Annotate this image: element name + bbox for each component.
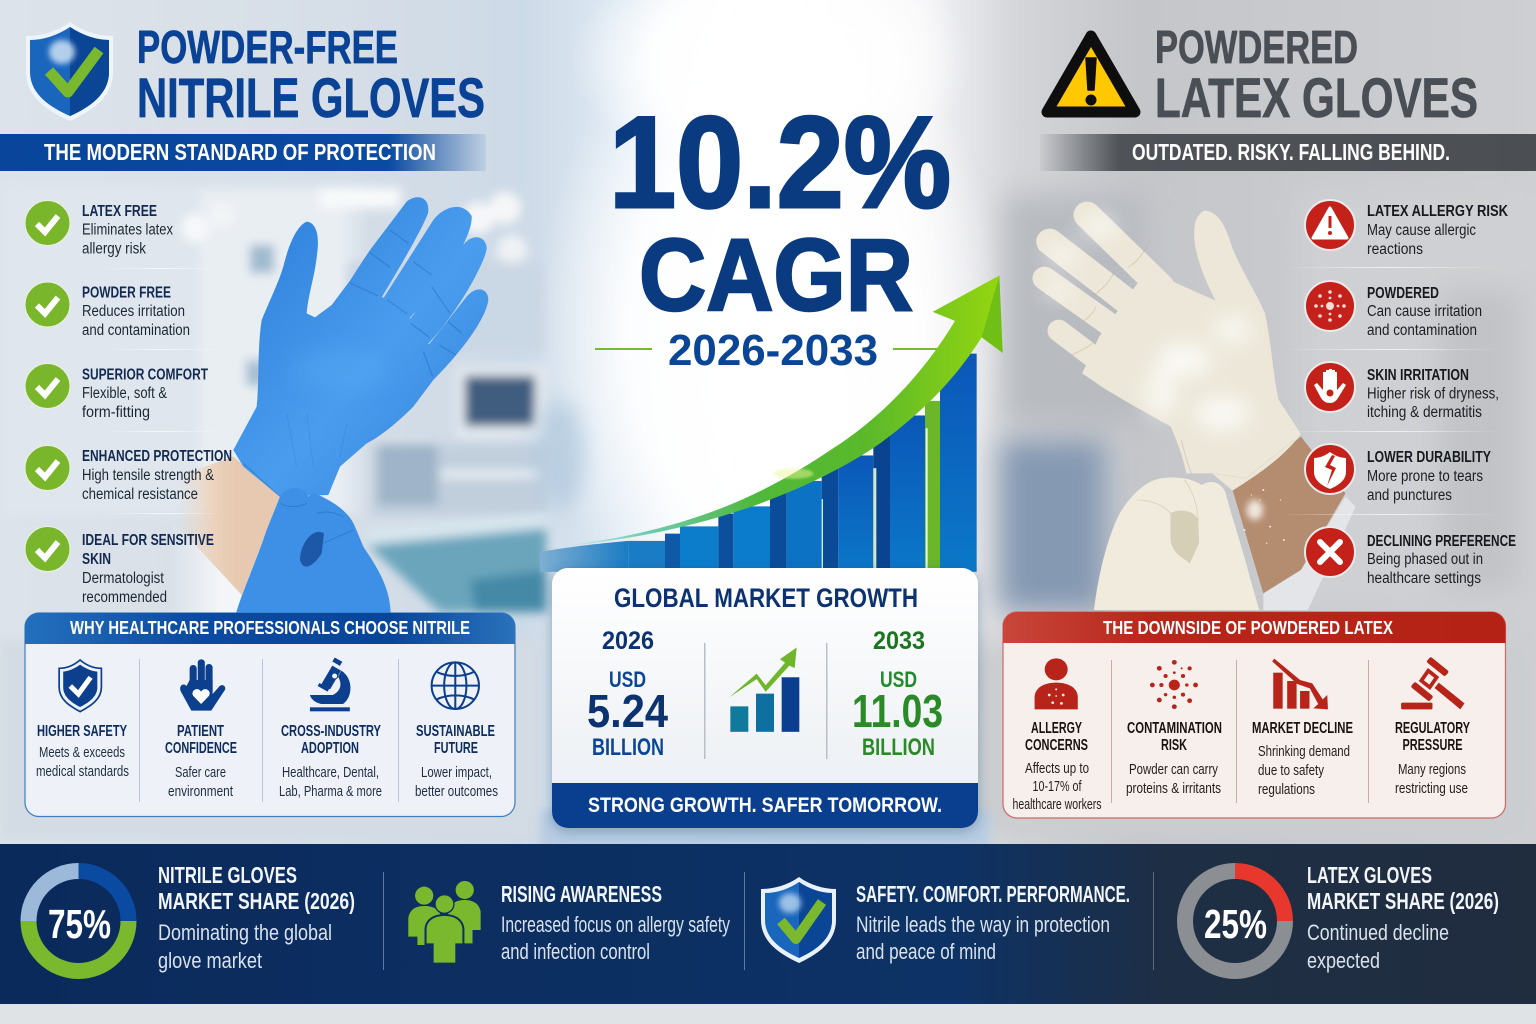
nitrile share donut: 75% — [48, 901, 111, 947]
risk: declining preference: healthcare settings — [1367, 570, 1481, 587]
market growth card — [552, 568, 978, 828]
rising awareness text: RISING AWARENESS — [501, 881, 662, 907]
column: higher safety: HIGHER SAFETY — [37, 723, 127, 740]
benefit: powder free — [25, 282, 190, 339]
latex gloves photo — [1044, 211, 1356, 610]
blurred operating room, right — [960, 190, 1536, 840]
2033 value: USD — [880, 667, 917, 692]
risk: declining preference — [1305, 527, 1516, 587]
column: cross-industry adoption — [279, 723, 382, 800]
column: sustainable future: better outcomes — [415, 784, 498, 800]
right title — [1155, 21, 1478, 129]
icon: globe — [432, 662, 479, 709]
icon: hand with heart — [180, 659, 225, 711]
blurred operating room, left — [0, 185, 547, 840]
risk: lower durability: More prone to tears — [1367, 468, 1483, 485]
benefit: superior comfort: Flexible, soft & — [82, 385, 168, 402]
column: sustainable future: Lower impact, — [421, 765, 492, 781]
benefit: enhanced protection — [25, 446, 232, 503]
column: allergy concerns: healthcare workers — [1012, 797, 1102, 813]
risk: lower durability: and punctures — [1367, 487, 1452, 504]
column: regulatory pressure: restricting use — [1395, 781, 1468, 797]
2033 value: 2033 — [873, 627, 925, 655]
pulling hand — [236, 488, 391, 613]
nitrile share donut — [28, 871, 128, 971]
column: higher safety: Meets & exceeds — [39, 745, 125, 761]
benefit: superior comfort: form-fitting — [82, 404, 150, 421]
benefit: latex free: LATEX FREE — [82, 203, 157, 220]
column: higher safety: medical standards — [36, 764, 129, 780]
latex share text — [1307, 862, 1499, 973]
column: regulatory pressure — [1395, 720, 1470, 797]
blue nitrile gloves photo — [170, 197, 488, 613]
icon: shield check — [59, 660, 101, 712]
column: contamination risk — [1126, 720, 1222, 797]
benefit: sensitive skin: Dermatologist — [82, 570, 165, 587]
column: allergy concerns: CONCERNS — [1025, 737, 1088, 754]
risk: powdered: POWDERED — [1367, 285, 1439, 302]
icon: allergy person — [1035, 658, 1078, 709]
risk: skin irritation: SKIN IRRITATION — [1367, 367, 1469, 384]
column: contamination risk: proteins & irritants — [1126, 781, 1221, 797]
icon: gavel — [1401, 657, 1465, 709]
column: patient confidence: CONFIDENCE — [165, 740, 237, 757]
glove hand — [233, 197, 488, 497]
latex share text: Continued decline — [1307, 920, 1449, 945]
safety comfort performance text: and peace of mind — [856, 939, 996, 964]
benefit: enhanced protection: chemical resistance — [82, 486, 198, 503]
column: allergy concerns: ALLERGY — [1031, 720, 1082, 737]
column: market decline — [1252, 720, 1353, 798]
pulling hand — [1094, 477, 1259, 610]
column: patient confidence: environment — [168, 784, 233, 800]
column: allergy concerns: 10-17% of — [1032, 779, 1082, 795]
benefit: powder free: POWDER FREE — [82, 284, 171, 302]
2033 value: BILLION — [862, 734, 935, 761]
left benefits list — [25, 200, 232, 606]
latex share text: expected — [1307, 948, 1380, 973]
nitrile share text: MARKET SHARE (2026) — [158, 888, 355, 914]
benefit: enhanced protection: High tensile strength & — [82, 467, 215, 484]
column: regulatory pressure: REGULATORY — [1395, 720, 1470, 737]
benefit: sensitive skin: IDEAL FOR SENSITIVE — [82, 532, 214, 549]
fingers — [1044, 215, 1161, 367]
benefit: sensitive skin: recommended — [82, 589, 167, 606]
column: patient confidence: Safer care — [175, 765, 226, 781]
2033 value — [852, 627, 943, 761]
column: market decline: regulations — [1258, 782, 1315, 798]
risk: powdered: Can cause irritation — [1367, 303, 1482, 320]
forearm — [177, 457, 280, 595]
right subtitle banner — [1040, 134, 1536, 171]
nitrile share text: NITRILE GLOVES — [158, 862, 297, 888]
nitrile share text — [158, 862, 355, 973]
risk: skin irritation: Higher risk of dryness, — [1367, 386, 1499, 402]
growth bars and arrow — [540, 275, 1003, 572]
right risks list — [1280, 200, 1516, 587]
benefit: latex free: allergy risk — [82, 240, 146, 258]
latex share donut — [1185, 871, 1285, 971]
rising awareness text — [501, 881, 730, 964]
rising awareness text: and infection control — [501, 939, 650, 964]
benefit: enhanced protection: ENHANCED PROTECTION — [82, 448, 232, 465]
column: sustainable future — [415, 723, 498, 800]
CAGR headline: CAGR — [639, 218, 913, 332]
safety comfort performance text: SAFETY. COMFORT. PERFORMANCE. — [856, 881, 1130, 907]
market growth card: GLOBAL MARKET GROWTH — [614, 583, 918, 613]
benefit: sensitive skin: SKIN — [82, 551, 111, 568]
risk: powdered: and contamination — [1367, 322, 1477, 339]
latex share donut: 25% — [1204, 901, 1267, 947]
risk: declining preference: Being phased out in — [1367, 551, 1483, 568]
powder on palm — [1044, 217, 1250, 430]
column: patient confidence: PATIENT — [177, 723, 224, 740]
warning triangle icon — [1047, 36, 1135, 112]
column: allergy concerns — [1012, 720, 1102, 813]
safety comfort performance text: Nitrile leads the way in protection — [856, 912, 1110, 937]
risk: lower durability: LOWER DURABILITY — [1367, 449, 1492, 466]
forearm — [1233, 437, 1345, 593]
column: allergy concerns: Affects up to — [1025, 761, 1089, 777]
benefit: latex free — [25, 200, 173, 258]
risk: latex allergy — [1305, 200, 1509, 258]
column: market decline: Shrinking demand — [1258, 744, 1350, 760]
safety comfort performance text — [856, 881, 1130, 964]
column: cross-industry adoption: CROSS-INDUSTRY — [281, 723, 381, 740]
2026 value — [587, 627, 668, 761]
risk: latex allergy: LATEX ALLERGY RISK — [1367, 203, 1509, 220]
CAGR headline: 10.2% — [609, 89, 951, 235]
benefit: sensitive skin — [25, 526, 214, 606]
column: regulatory pressure: Many regions — [1398, 762, 1466, 778]
nitrile share text: Dominating the global — [158, 920, 332, 945]
risk: powdered — [1305, 281, 1482, 339]
CAGR headline: 2026-2033 — [668, 326, 878, 375]
left subtitle banner — [0, 134, 486, 171]
risk: lower durability — [1305, 444, 1492, 504]
2026 value: 2026 — [602, 627, 654, 655]
CAGR headline — [595, 89, 951, 375]
left title: POWDER-FREE — [137, 21, 398, 73]
market growth card: STRONG GROWTH. SAFER TOMORROW. — [588, 794, 942, 817]
left header shield icon — [26, 22, 113, 121]
2033 value: 11.03 — [852, 685, 943, 737]
column: regulatory pressure: PRESSURE — [1402, 737, 1462, 754]
icon: microscope — [310, 657, 350, 711]
left subtitle banner: THE MODERN STANDARD OF PROTECTION — [44, 139, 436, 165]
2026 value: 5.24 — [587, 685, 668, 737]
risk: latex allergy: May cause allergic — [1367, 222, 1476, 239]
left title — [137, 21, 485, 129]
column: contamination risk: Powder can carry — [1129, 762, 1219, 778]
column: patient confidence — [165, 723, 237, 800]
icon: market decline — [1272, 659, 1328, 709]
right title: POWDERED — [1155, 21, 1358, 73]
column: sustainable future: FUTURE — [434, 740, 478, 757]
glove palm and thumb — [1082, 211, 1301, 491]
column: contamination risk: RISK — [1161, 737, 1188, 754]
column: market decline: MARKET DECLINE — [1252, 720, 1353, 737]
panel: why healthcare professionals choose nitrile — [25, 613, 515, 816]
benefit: superior comfort: SUPERIOR COMFORT — [82, 366, 208, 384]
2026 value: BILLION — [592, 734, 664, 761]
risk: latex allergy: reactions — [1367, 241, 1423, 258]
column: contamination risk: CONTAMINATION — [1127, 720, 1222, 737]
benefit: latex free: Eliminates latex — [82, 222, 173, 238]
left title: NITRILE GLOVES — [137, 66, 485, 129]
column: cross-industry adoption: ADOPTION — [301, 740, 359, 757]
nitrile share text: glove market — [158, 948, 262, 973]
latex share text: LATEX GLOVES — [1307, 862, 1432, 888]
powder on wrist — [1244, 489, 1285, 544]
panel: the downside of powdered latex: THE DOWNSIDE OF POWDERED LATEX — [1103, 617, 1394, 638]
icon: contamination particles — [1150, 660, 1198, 709]
rising awareness text: Increased focus on allergy safety — [501, 912, 730, 937]
column: cross-industry adoption: Lab, Pharma & more — [279, 784, 382, 800]
column: higher safety — [36, 723, 129, 780]
column: cross-industry adoption: Healthcare, Dental, — [282, 765, 379, 781]
panel: the downside of powdered latex — [1003, 612, 1506, 818]
panel: why healthcare professionals choose nitrile: WHY HEALTHCARE PROFESSIONALS CHOOSE NITRILE — [70, 617, 470, 638]
benefit: powder free: and contamination — [82, 322, 190, 339]
risk: skin irritation — [1305, 362, 1499, 421]
risk: skin irritation: itching & dermatitis — [1367, 404, 1482, 421]
icon: people — [408, 881, 481, 964]
bottom statistics band — [0, 844, 1536, 1004]
icon: safety shield — [761, 877, 836, 963]
icon: mini growth chart — [729, 647, 799, 732]
2026 value: USD — [609, 667, 646, 692]
benefit: superior comfort — [25, 364, 208, 421]
benefit: powder free: Reduces irritation — [82, 303, 185, 320]
column: sustainable future: SUSTAINABLE — [416, 723, 495, 740]
column: market decline: due to safety — [1258, 763, 1325, 779]
